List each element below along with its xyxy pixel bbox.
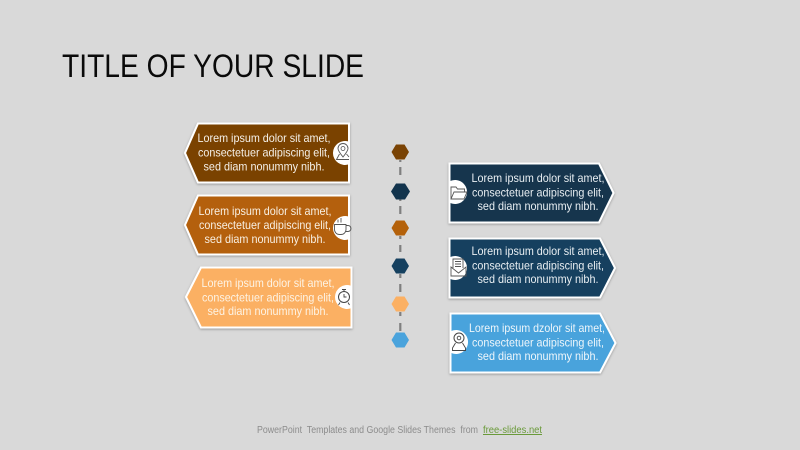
panel text: right 1: consectetuer adipiscing elit,	[472, 186, 604, 200]
panel: left 3	[186, 268, 352, 328]
panel text: left 3: sed diam nonummy nibh.	[208, 304, 328, 318]
panel text: right 3: sed diam nonummy nibh.	[478, 349, 598, 363]
icon: document envelope	[450, 256, 467, 280]
footer credit: PowerPoint Templates and Google Slides Themes from	[257, 425, 478, 436]
panel: left 1	[185, 124, 349, 182]
footer link: free-slides.net	[483, 425, 542, 436]
title: TITLE OF YOUR SLIDE	[62, 48, 364, 84]
panel text: left 2: consectetuer adipiscing elit,	[199, 218, 331, 232]
panel text: right 1: Lorem ipsum dolor sit amet,	[472, 171, 604, 185]
icon: map pin	[333, 141, 349, 165]
icon: webcam	[451, 330, 468, 354]
panel text: right 3: Lorem ipsum dzolor sit amet,	[469, 321, 605, 335]
panel text: right 3: consectetuer adipiscing elit,	[472, 336, 604, 350]
panel text: left 3: consectetuer adipiscing elit,	[202, 290, 334, 304]
panel text: left 1: sed diam nonummy nibh.	[204, 160, 324, 174]
icon: folder	[450, 180, 467, 204]
icon: coffee cup	[333, 216, 351, 240]
panel: right 3	[450, 314, 616, 372]
panel text: right 1: sed diam nonummy nibh.	[478, 199, 598, 213]
panel text: left 2: sed diam nonummy nibh.	[204, 232, 326, 246]
icon: alarm clock	[335, 285, 351, 309]
panel text: right 2: consectetuer adipiscing elit,	[472, 258, 604, 272]
panel text: left 1: consectetuer adipiscing elit,	[198, 146, 330, 160]
panel: right 2	[450, 238, 615, 298]
panel: left 2	[185, 196, 351, 254]
panel text: right 2: sed diam nonummy nibh.	[478, 272, 598, 286]
panel text: left 1: Lorem ipsum dolor sit amet,	[198, 131, 330, 145]
timeline connector	[399, 160, 401, 331]
timeline hexagons	[391, 144, 410, 348]
panel text: right 2: Lorem ipsum dolor sit amet,	[472, 244, 604, 258]
panel text: left 3: Lorem ipsum dolor sit amet,	[202, 276, 334, 290]
panel: right 1	[450, 164, 614, 222]
panel text: left 2: Lorem ipsum dolor sit amet,	[198, 204, 332, 218]
